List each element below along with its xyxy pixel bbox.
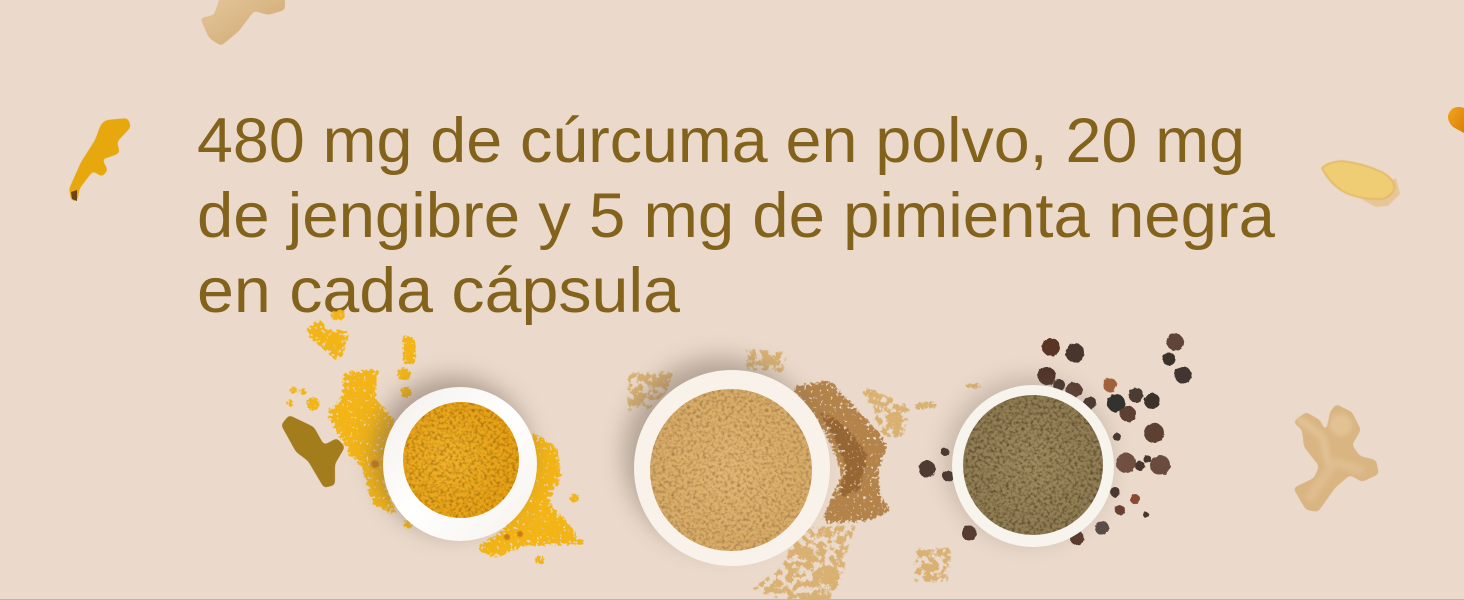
heading (197, 106, 1276, 326)
black peppercorns (918, 334, 1192, 545)
heading: en cada cápsula (197, 256, 681, 326)
turmeric spill (286, 310, 584, 565)
bottom edge line (0, 599, 1464, 600)
ginger powder spill (625, 345, 982, 600)
icon: ginger slice (1322, 161, 1400, 207)
bowl: ginger powder (624, 358, 830, 566)
heading: de jengibre y 5 mg de pimienta negra (197, 181, 1276, 251)
icon: ginger root lower right (1293, 404, 1379, 512)
icon: dried turmeric top left (69, 118, 131, 202)
heading: 480 mg de cúrcuma en polvo, 20 mg (197, 106, 1245, 176)
bowl: black pepper powder (946, 378, 1114, 547)
icon: ginger root top (200, 0, 285, 46)
icon: dried turmeric beside bowl (281, 415, 345, 488)
icon: capsule at right edge (1448, 107, 1464, 133)
turmeric spill red accents (371, 460, 523, 540)
bowl: turmeric powder (374, 377, 537, 541)
